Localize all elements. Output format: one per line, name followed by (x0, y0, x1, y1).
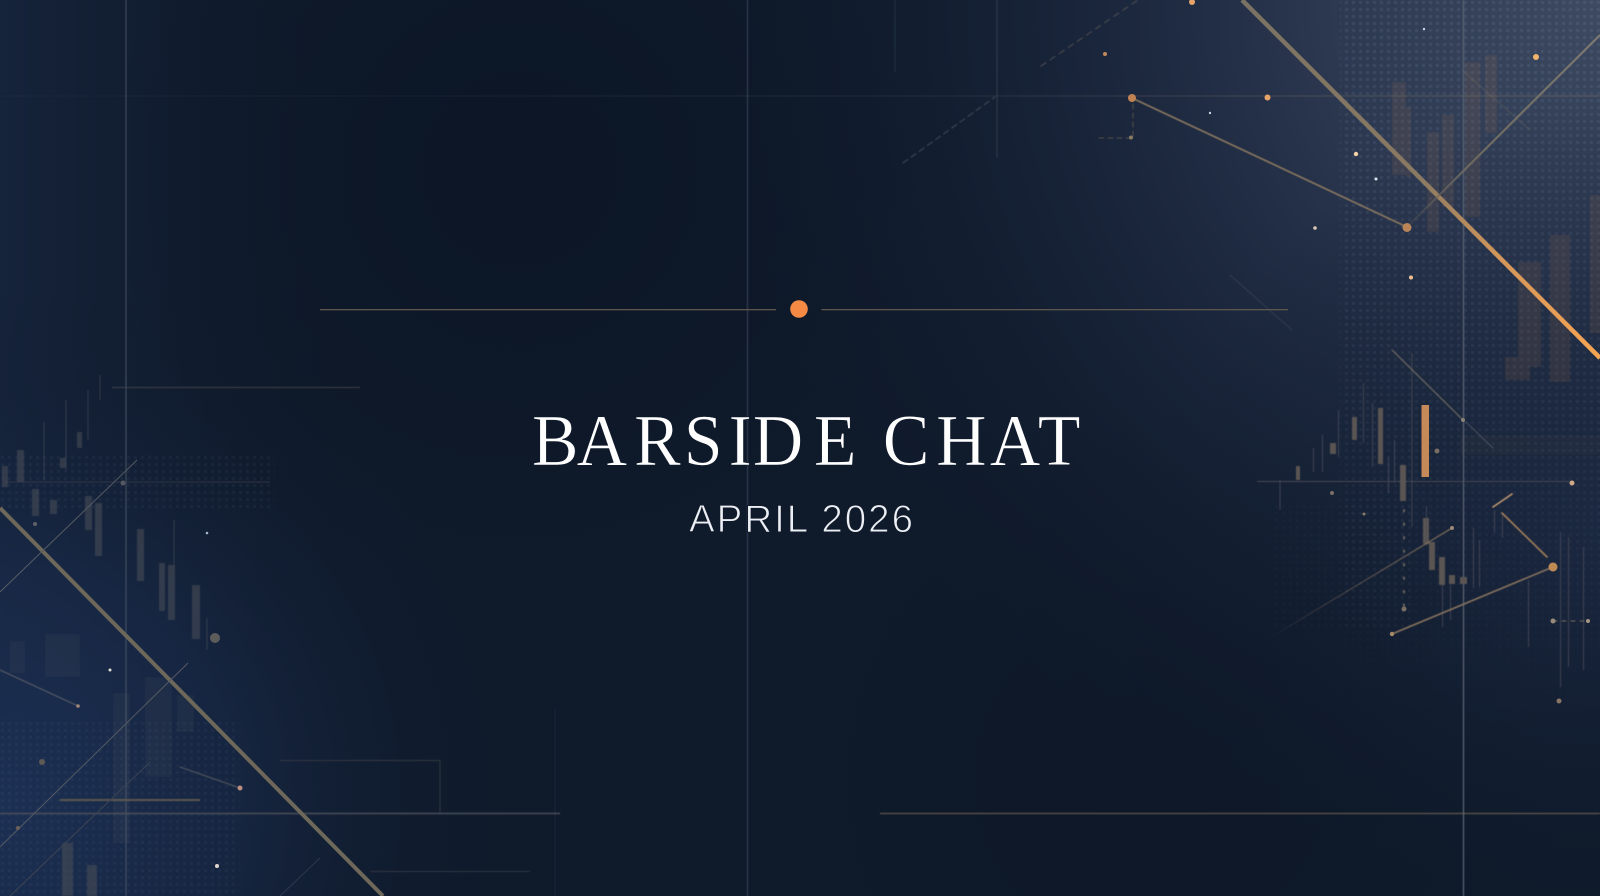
candlesticks: right chart (1280, 353, 1584, 687)
candlesticks: left chart (2, 375, 207, 896)
faint volume blocks: lower left (10, 634, 194, 843)
diagonal accent: top right (1242, 0, 1600, 358)
divider: right rule (822, 309, 1288, 310)
dot matrix texture (2, 1, 1600, 619)
diagonal accent: lower left (0, 460, 383, 896)
candlesticks: top right bars (1392, 55, 1600, 455)
divider: left rule (320, 309, 776, 310)
title: BARSIDE CHAT (532, 401, 1081, 481)
divider: center dot (790, 300, 808, 318)
divider with orange dot (320, 300, 1288, 318)
subtitle: date: APRIL 2026 (689, 498, 913, 541)
highlighted orange candle (1422, 405, 1429, 477)
